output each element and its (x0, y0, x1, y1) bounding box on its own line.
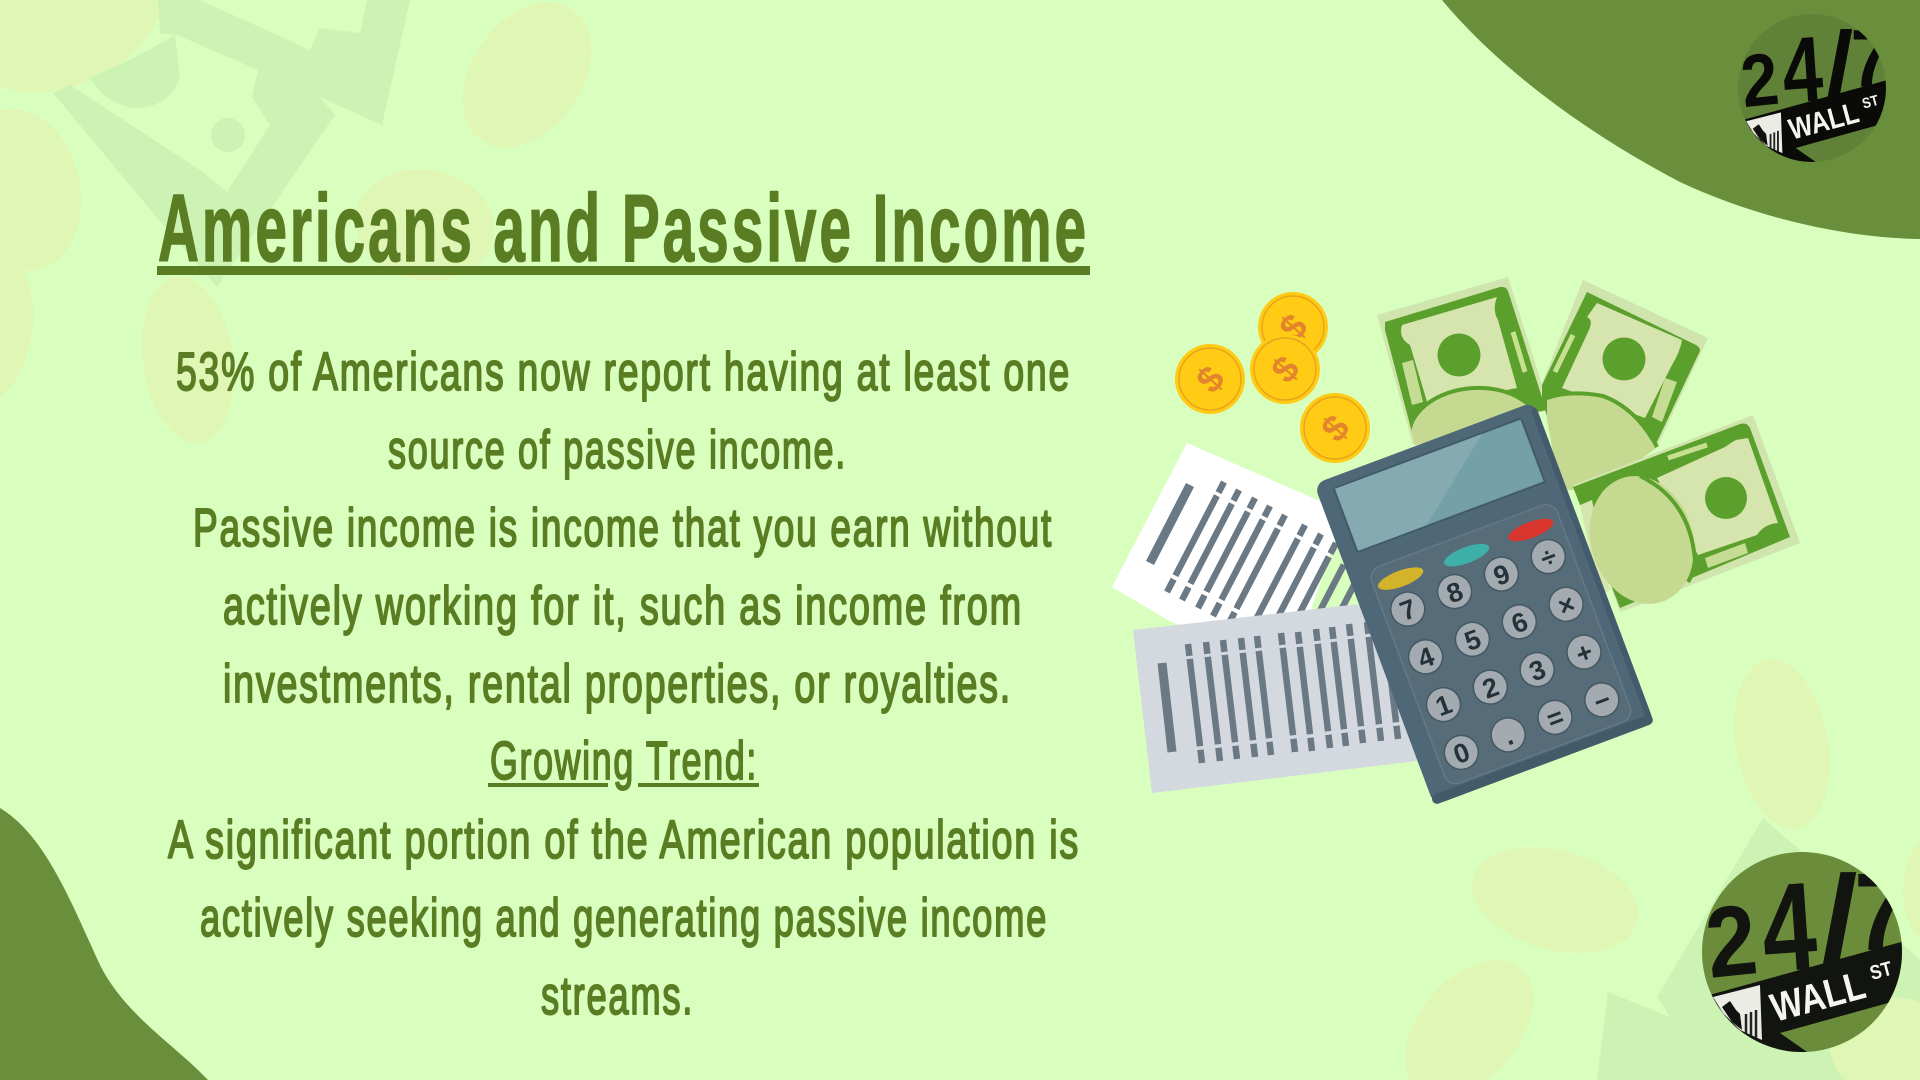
logo: bottom right 24/7 Wall St: 7 (1854, 851, 1910, 974)
body text: 53% statistic: source of passive income. (388, 420, 847, 480)
calculator keys: . (1500, 720, 1517, 751)
subheading: Growing Trend: Growing Trend: (490, 731, 758, 791)
calculator keys: 4 (1414, 641, 1438, 674)
body text: 53% statistic (176, 342, 1071, 480)
calculator keypad panel (1368, 501, 1634, 787)
icon: money bill, left (1377, 277, 1546, 445)
icon: white receipt (1112, 443, 1367, 670)
corner shape: top right (1442, 0, 1920, 239)
icon: money bill, middle (1542, 280, 1708, 490)
calculator function buttons (1375, 514, 1556, 595)
calculator keys: − (1590, 684, 1615, 718)
logo: top right 24/7 Wall St: ST (1861, 93, 1881, 113)
body text: growing trend description: actively seeking and generating passive income (200, 888, 1048, 948)
calculator keys (1386, 535, 1624, 774)
calculator keys: + (1572, 636, 1597, 670)
icon: gold coins: $ (1263, 348, 1308, 391)
body text: passive income definition (193, 498, 1053, 714)
calculator screen (1332, 417, 1546, 553)
icon: gold coins: $ (1313, 407, 1358, 450)
title (157, 175, 1090, 282)
body text: passive income definition: investments, rental properties, or royalties. (223, 654, 1012, 714)
body text: passive income definition: Passive income is income that you earn without (193, 498, 1053, 558)
calculator keys: 8 (1443, 576, 1467, 609)
logo: top right 24/7 Wall St: / (1825, 12, 1853, 123)
logo: bottom right 24/7 Wall St: 2 (1701, 883, 1762, 1000)
watermark: bottom-right money bill (1597, 818, 1920, 1080)
logo: bottom right 24/7 Wall St: 4 (1757, 857, 1821, 999)
icon: gold coins (1175, 292, 1370, 463)
icon: gold coins: $ (1188, 358, 1233, 401)
body text: 53% statistic: 53% of Americans now report having at least one (176, 342, 1071, 402)
logo: bottom right 24/7 Wall St: ST (1868, 958, 1895, 985)
subheading: Growing Trend (488, 731, 759, 791)
logo: top right 24/7 Wall St: 2 (1737, 37, 1782, 123)
icon: calculator (1314, 402, 1654, 805)
body text: growing trend description (168, 810, 1080, 1026)
body text: growing trend description: streams. (541, 966, 694, 1026)
calculator keys: = (1543, 702, 1568, 735)
body text: passive income definition: actively working for it, such as income from (223, 576, 1023, 636)
icon: grey receipt (1133, 603, 1425, 793)
logo: bottom right 24/7 Wall St: WALL (1766, 963, 1870, 1031)
watermark: top-left money bill (53, 0, 410, 287)
calculator keys: 9 (1489, 558, 1514, 592)
watermark: top-left coins (0, 0, 618, 449)
calculator keys: 7 (1396, 593, 1420, 627)
calculator keys: 6 (1507, 606, 1532, 639)
logo: bottom right 24/7 Wall St (1702, 852, 1902, 1052)
corner shape: bottom left (0, 808, 208, 1080)
calculator keys: 0 (1449, 737, 1474, 770)
calculator keys: 5 (1460, 624, 1485, 657)
icon: gold coins: $ (1271, 306, 1316, 349)
logo: bottom right 24/7 Wall St: / (1820, 848, 1858, 999)
logo: top right 24/7 Wall St: WALL (1785, 96, 1862, 147)
body text: growing trend description: A significant portion of the American population is (168, 810, 1080, 870)
logo: top right 24/7 Wall St: 7 (1850, 14, 1892, 105)
calculator keys: 3 (1525, 654, 1550, 687)
logo: top right 24/7 Wall St (1738, 14, 1886, 162)
watermark: bottom-right coins (1379, 651, 1920, 1080)
title: Americans and Passive Income (158, 175, 1089, 282)
calculator keys: ÷ (1536, 541, 1561, 574)
icon: money bill, right (1573, 415, 1800, 617)
calculator keys: 1 (1432, 689, 1456, 722)
calculator keys: 2 (1478, 671, 1503, 705)
logo: top right 24/7 Wall St: 4 (1779, 16, 1826, 123)
calculator keys: × (1554, 588, 1579, 622)
